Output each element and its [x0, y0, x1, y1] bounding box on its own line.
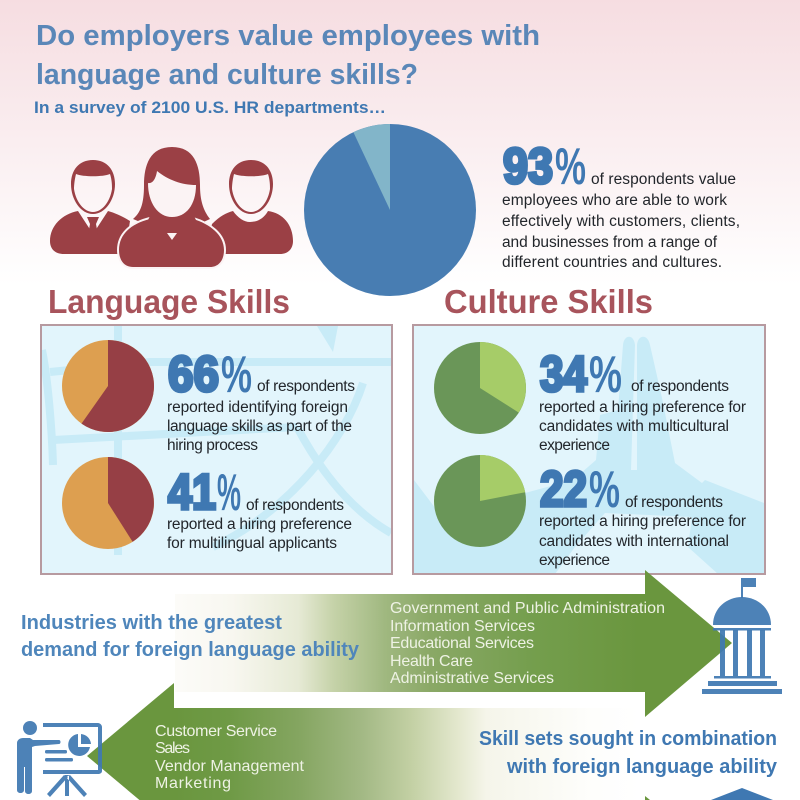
stat: 34%: %	[589, 346, 622, 404]
icon: man with tie	[50, 160, 130, 254]
chart: 22% pie	[434, 455, 526, 547]
panel: culture skills	[413, 325, 765, 574]
stat: 66%: %	[221, 346, 252, 404]
background: praying hands	[414, 337, 764, 574]
stat: 41%: of respondents	[246, 497, 344, 514]
stat: 22%	[539, 461, 746, 569]
stat: 34%: 34	[540, 346, 587, 402]
skill sets list: Sales	[155, 740, 190, 757]
stat: 93%: different countries and cultures.	[502, 254, 722, 271]
industries list	[390, 600, 665, 687]
industries heading	[21, 612, 360, 661]
subtitle: In a survey of 2100 U.S. HR departments…	[34, 98, 386, 117]
skill sets list	[155, 723, 305, 792]
icon: next section top	[711, 788, 773, 800]
chart: 41% pie	[62, 457, 154, 549]
industries list: Educational Services	[390, 635, 534, 652]
industries list: Government and Public Administration	[390, 600, 665, 617]
stat: 22%: candidates with international	[539, 533, 729, 550]
stat: 41%: %	[217, 464, 241, 522]
chart: 34% pie	[434, 342, 526, 434]
stat: 66%: reported identifying foreign	[167, 399, 348, 416]
stat: 34%: reported a hiring preference for	[539, 399, 746, 416]
title: Do employers value employees with	[36, 20, 540, 52]
stat: 93%: effectively with customers, clients,	[502, 213, 740, 230]
icon: government building	[702, 578, 782, 694]
heading: Culture Skills: Culture Skills	[444, 283, 653, 320]
title: language and culture skills?	[36, 59, 418, 91]
stat: 66%: of respondents	[257, 378, 355, 395]
skill sets list: Vendor Management	[155, 758, 305, 775]
stat: 22%: reported a hiring preference for	[539, 513, 746, 530]
stat: 34%: candidates with multicultural	[539, 418, 729, 435]
icon: woman	[119, 147, 224, 267]
stat: 22%: %	[589, 461, 620, 519]
industries list: Information Services	[390, 618, 535, 635]
stat: 66%: language skills as part of the	[167, 418, 352, 435]
chart: 93% pie	[304, 124, 476, 296]
industries list: Health Care	[390, 653, 473, 670]
arrow: right-pointing green	[175, 570, 732, 717]
industries heading: demand for foreign language ability	[21, 639, 360, 661]
stat: 41%: for multilingual applicants	[167, 535, 337, 552]
skill sets heading: with foreign language ability	[506, 756, 778, 778]
stat: 93%: %	[555, 138, 586, 196]
panel: language skills	[41, 325, 392, 574]
arrow tip: next section	[645, 796, 650, 800]
background: Chinese character strokes	[42, 326, 391, 555]
stat: 93%: and businesses from a range of	[502, 234, 718, 251]
skill sets list: Marketing	[155, 775, 231, 792]
stat: 41%	[167, 464, 352, 552]
page background	[0, 0, 800, 285]
stat: 66%: hiring process	[167, 437, 258, 454]
skill sets heading	[479, 728, 778, 778]
stat: 34%: experience	[539, 437, 610, 454]
icon: three people	[50, 147, 293, 267]
stat: 22%: 22	[540, 461, 587, 517]
stat: 22%: experience	[539, 552, 610, 569]
chart: 66% pie	[62, 340, 154, 432]
title	[36, 20, 540, 91]
stat: 93%	[502, 138, 740, 271]
skill sets list: Customer Service	[155, 723, 277, 740]
stat: 93%: 93	[503, 138, 553, 194]
icon: man without tie	[205, 160, 293, 254]
industries heading: Industries with the greatest	[21, 612, 282, 634]
stat: 34%: of respondents	[631, 378, 729, 395]
stat: 41%: reported a hiring preference	[167, 516, 352, 533]
heading: Language Skills: Language Skills	[48, 283, 290, 320]
stat: 41%: 41	[168, 464, 216, 520]
arrow: left-pointing green	[87, 683, 640, 800]
stat: 34%	[539, 346, 746, 454]
stat: 66%	[167, 346, 355, 454]
skill sets heading: Skill sets sought in combination	[479, 728, 777, 750]
stat: 93%: of respondents value	[591, 171, 736, 188]
stat: 22%: of respondents	[625, 494, 723, 511]
icon: presenter with chart	[17, 721, 102, 797]
stat: 66%: 66	[168, 346, 219, 402]
industries list: Administrative Services	[390, 670, 554, 687]
stat: 93%: employees who are able to work	[502, 192, 727, 209]
